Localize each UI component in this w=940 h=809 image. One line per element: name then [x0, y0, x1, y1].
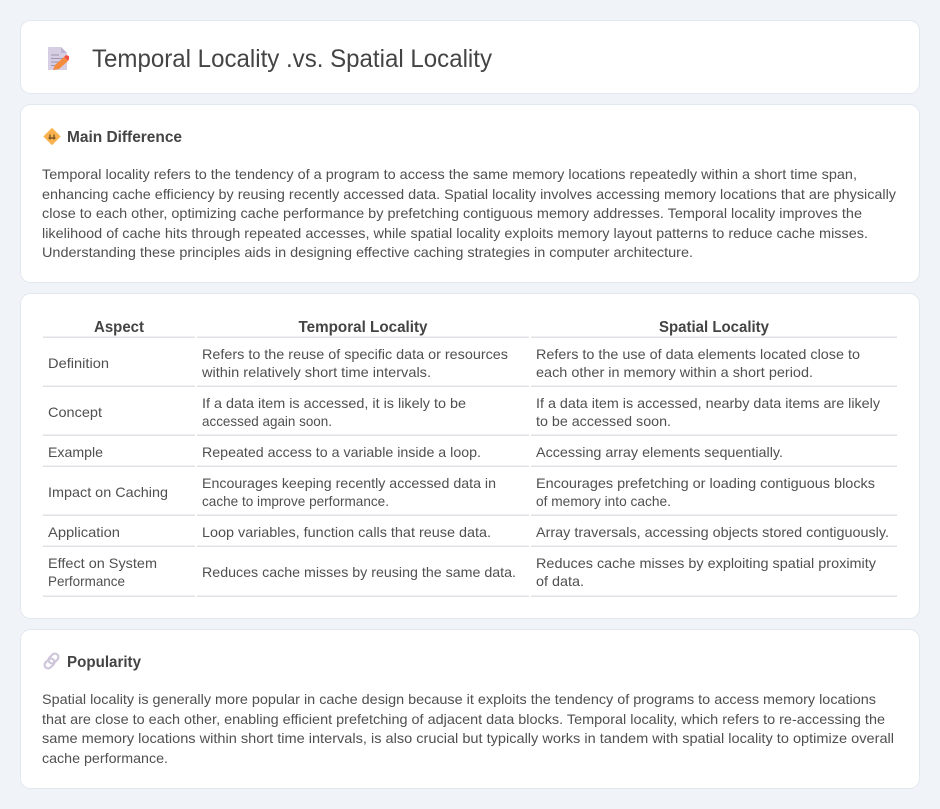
row: example: [48, 444, 783, 460]
row: effect on system performance: Reduces cache misses by reusing the same data.: [202, 564, 516, 580]
row: definition: within relatively short time intervals.: [201, 364, 431, 380]
row: concept: If a data item is accessed, it is likely to be: [202, 395, 466, 411]
row: definition: [48, 346, 860, 380]
row: impact on caching: Impact on Caching: [48, 484, 168, 500]
icon: warning diamond: [44, 128, 60, 144]
row: effect on system performance: of data.: [536, 573, 584, 589]
heading: popularity: Popularity: [67, 654, 141, 671]
text block: popularity paragraph: that are close to each other, enabling efficient prefetching of adjacent data blocks. Temporal locality, which refers to re-accessing the: [42, 711, 885, 727]
row: effect on system performance: Reduces cache misses by exploiting spatial proximity: [536, 555, 876, 571]
row: definition: Refers to the use of data elements located close to: [536, 346, 860, 362]
panel: popularity: [20, 630, 920, 788]
row: example: Repeated access to a variable inside a loop.: [202, 444, 481, 460]
text block: popularity paragraph: same memory locations within short time intervals, is also crucial but typically works in tandem with spatial locality to optimize overall: [42, 730, 894, 746]
text block: main difference paragraph: enhancing cache efficiency by reusing recently accessed data. Spatial locality involves accessing memory locations that are physically: [42, 186, 896, 202]
table header: [94, 319, 769, 336]
row: impact on caching: cache to improve performance.: [202, 493, 389, 509]
row: definition: Definition: [48, 355, 109, 371]
table header: Temporal Locality: [298, 319, 428, 336]
row: impact on caching: [48, 475, 875, 509]
text block: popularity paragraph: Spatial locality is generally more popular in cache design because it exploits the tendency of programs to access memory locations: [42, 691, 876, 707]
icon: document with pencil: [48, 47, 69, 70]
icon: chain link: [43, 652, 60, 670]
text block: popularity paragraph: cache performance.: [42, 750, 168, 766]
row: effect on system performance: Performance: [48, 573, 125, 589]
row: impact on caching: Encourages keeping recently accessed data in: [202, 475, 496, 491]
row: concept: Concept: [48, 404, 102, 420]
row: concept: accessed again soon.: [202, 413, 332, 429]
row: effect on system performance: [48, 555, 876, 589]
panel: header: [20, 20, 920, 94]
row: concept: If a data item is accessed, nearby data items are likely: [536, 395, 880, 411]
text block: main difference paragraph: Temporal locality refers to the tendency of a program to access the same memory locations repeatedly within a short time span,: [42, 166, 857, 182]
row: example: Example: [48, 444, 103, 460]
panel: main difference: [20, 104, 920, 282]
title: Temporal Locality .vs. Spatial Locality: [92, 45, 492, 73]
row: application: [48, 524, 889, 540]
row: definition: Refers to the reuse of specific data or resources: [202, 346, 508, 362]
text block: popularity paragraph: [42, 691, 894, 766]
row: example: Accessing array elements sequentially.: [536, 444, 783, 460]
row: concept: to be accessed soon.: [536, 413, 671, 429]
text block: main difference paragraph: close to each other, optimizing cache performance by prefetching contiguous memory addresses. Temporal locality improves the: [42, 205, 862, 221]
text block: main difference paragraph: Understanding these principles aids in designing effective caching strategies in computer architecture.: [42, 244, 693, 260]
row: definition: each other in memory within a short period.: [536, 364, 813, 380]
text block: main difference paragraph: [42, 166, 896, 260]
row: application: Loop variables, function calls that reuse data.: [202, 524, 491, 540]
row: effect on system performance: Effect on System: [48, 555, 157, 571]
row: impact on caching: Encourages prefetching or loading contiguous blocks: [536, 475, 875, 491]
table header: Aspect: [94, 319, 145, 336]
row: application: Application: [48, 524, 120, 540]
panel: comparison table: [20, 294, 920, 618]
row: application: Array traversals, accessing objects stored contiguously.: [536, 524, 889, 540]
row: concept: [48, 395, 880, 429]
table header: Spatial Locality: [659, 319, 769, 336]
text block: main difference paragraph: likelihood of cache hits through repeated accesses, while spatial locality exploits memory layout patterns to reduce cache misses.: [42, 225, 868, 241]
row: impact on caching: of memory into cache.: [536, 493, 671, 509]
heading: main difference: Main Difference: [67, 129, 182, 146]
